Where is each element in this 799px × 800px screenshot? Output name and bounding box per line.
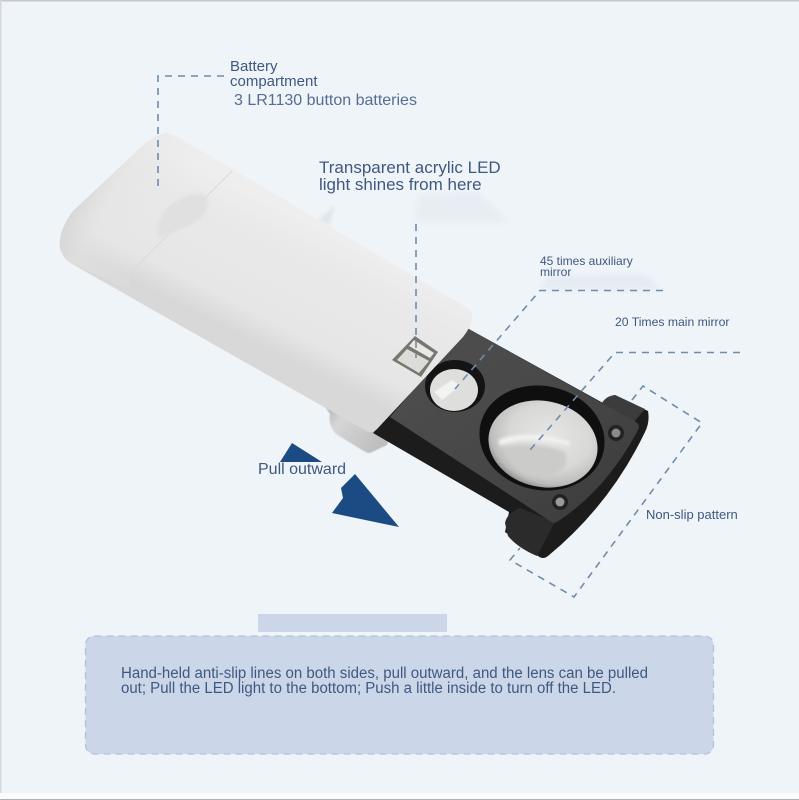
leader: 20x bbox=[530, 352, 740, 450]
large lens bbox=[470, 374, 614, 502]
screws bbox=[552, 425, 624, 510]
leader: battery bbox=[158, 76, 224, 186]
label: pull outward: Pull outward bbox=[258, 461, 346, 478]
arrow: pull outward upper bbox=[280, 443, 322, 462]
label: 45x: mirror bbox=[540, 265, 571, 279]
tab above note bbox=[258, 614, 447, 632]
upper grip bbox=[602, 395, 645, 423]
note panel bbox=[86, 636, 714, 754]
label: battery compartment: 3 LR1130 button batteries bbox=[234, 92, 417, 109]
grey underside tab bbox=[322, 402, 392, 453]
arrow: pull outward lower bbox=[332, 474, 399, 527]
label: 20x: 20 Times main mirror bbox=[615, 315, 729, 329]
label: non-slip: Non-slip pattern bbox=[646, 507, 738, 522]
note panel: Hand-held anti-slip lines on both sides, pull outward, and the lens can be pulled bbox=[121, 665, 648, 682]
dashed leader lines bbox=[158, 76, 740, 597]
label: 45x: 45 times auxiliary bbox=[540, 254, 633, 268]
label: battery compartment bbox=[230, 58, 417, 109]
magnifier product photo bbox=[60, 133, 649, 558]
leader: LED bbox=[415, 224, 417, 358]
faded smudges behind labels bbox=[318, 192, 662, 290]
label: battery compartment: Battery bbox=[230, 58, 278, 75]
leader: 45x bbox=[455, 290, 663, 389]
slider face bbox=[390, 328, 639, 523]
note panel: out; Pull the LED light to the bottom; Push a little inside to turn off the LED. bbox=[121, 680, 616, 697]
thumb notch bbox=[157, 194, 208, 238]
label: LED bbox=[319, 158, 501, 194]
black slider base bbox=[373, 328, 649, 558]
small lens bbox=[425, 360, 485, 412]
label: 45x bbox=[540, 254, 633, 279]
label: battery compartment: compartment bbox=[230, 73, 318, 90]
bracket: non-slip pattern bbox=[510, 386, 702, 597]
label: LED: Transparent acrylic LED bbox=[319, 158, 501, 177]
lower grip bbox=[505, 508, 555, 556]
LED window bbox=[392, 336, 438, 377]
body seam bbox=[128, 171, 232, 289]
label: LED: light shines from here bbox=[319, 175, 482, 194]
white body bbox=[60, 133, 472, 432]
body end shading bbox=[60, 133, 232, 289]
